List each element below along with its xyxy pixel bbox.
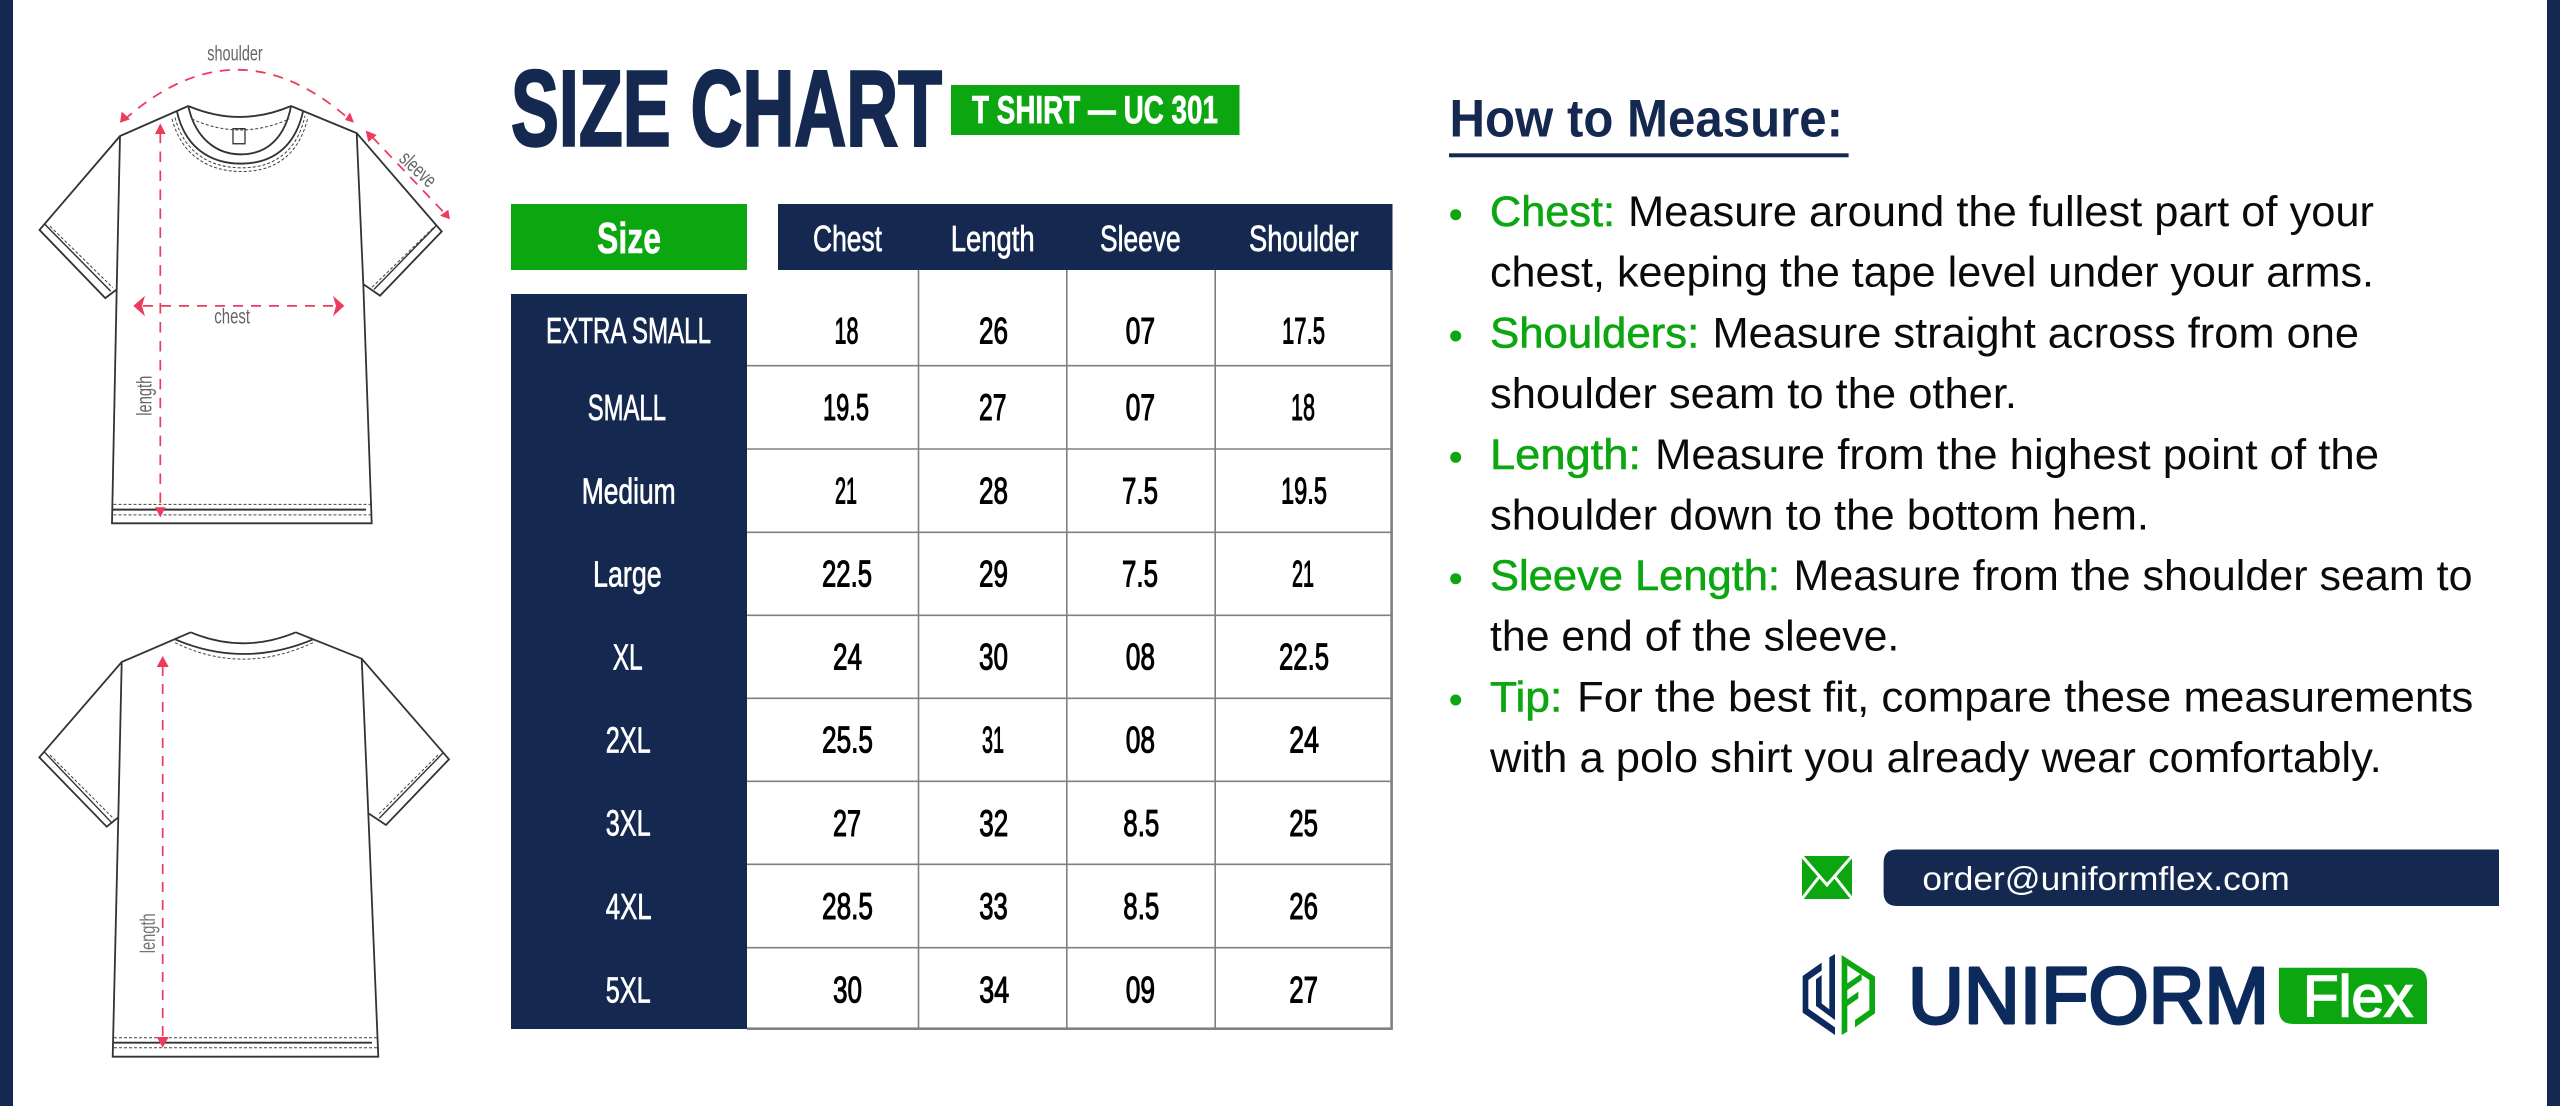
column values: shoulder: 18 [1291, 387, 1315, 428]
size labels column: 3XL [606, 803, 651, 844]
email pill [1884, 850, 2499, 906]
item: tip: For the best fit, compare these measurements [1577, 674, 2473, 722]
shirt front outline [40, 106, 442, 523]
column values: chest: 27 [833, 803, 861, 844]
size labels column [511, 294, 747, 1029]
badge: product code: T SHIRT — UC 301 [972, 89, 1218, 132]
logo badge: flex: Flex [2303, 965, 2413, 1030]
heading: how to measure: How to Measure: [1450, 90, 1843, 149]
column values: sleeve: 7.5 [1122, 470, 1158, 511]
header: size [511, 204, 747, 270]
header: measurement columns: Shoulder [1249, 218, 1359, 259]
column values: chest: 28.5 [822, 886, 873, 927]
item: sleeve length: Measure from the shoulder seam to [1794, 552, 2472, 600]
arrow: length [155, 123, 166, 517]
logo wordmark: UNIFORM [1908, 951, 2269, 1040]
item: length: Length: [1490, 431, 1641, 479]
item: shoulders: Shoulders: [1490, 310, 1699, 358]
column values: shoulder: 21 [1292, 554, 1314, 595]
column values: length: 33 [979, 886, 1008, 927]
arrow: sleeve [366, 130, 450, 219]
label: sleeve: sleeve [395, 147, 441, 192]
size labels column: 5XL [606, 969, 651, 1010]
logo: uniform flex [1803, 951, 2427, 1040]
size labels column: 2XL [606, 719, 651, 760]
column values: sleeve: 8.5 [1123, 803, 1159, 844]
column values: length: 28 [979, 470, 1008, 511]
right navy border [2547, 0, 2560, 1106]
column values: chest: 25.5 [822, 720, 873, 760]
item: length: shoulder down to the bottom hem. [1490, 491, 2149, 539]
item: sleeve length: Sleeve Length: [1490, 552, 1780, 600]
column values: length: 27 [979, 387, 1006, 428]
size labels column: EXTRA SMALL [546, 310, 711, 351]
arrow: shoulder [120, 70, 354, 123]
label: chest: chest [214, 306, 250, 328]
item: tip: Tip: [1490, 674, 1562, 722]
illustration: t-shirt back with measurements [39, 632, 449, 1057]
item: chest: chest, keeping the tape level under your arms. [1490, 249, 2374, 297]
column values: length: 34 [979, 969, 1009, 1010]
header: measurement columns [778, 204, 1392, 270]
header: measurement columns: Length [951, 218, 1035, 259]
grid lines [747, 270, 1393, 1029]
column values: length: 29 [979, 554, 1008, 595]
size labels column: Medium [582, 470, 676, 511]
column values: chest [822, 310, 873, 1010]
column values: chest: 19.5 [823, 387, 869, 428]
left navy border [0, 0, 13, 1106]
item: chest: Measure around the fullest part of your [1628, 188, 2374, 236]
item: length: Measure from the highest point of the [1655, 431, 2379, 479]
badge: product code [951, 85, 1240, 135]
column values: sleeve: 07 [1126, 310, 1155, 351]
item: tip [1450, 674, 2473, 782]
header: measurement columns: Sleeve [1100, 218, 1181, 259]
column values: shoulder: 26 [1289, 886, 1318, 927]
email pill: order@uniformflex.com [1922, 860, 2290, 897]
arrow: length back [157, 656, 169, 1048]
item: tip: with a polo shirt you already wear comfortably. [1489, 734, 2382, 782]
column values: chest: 22.5 [822, 554, 872, 595]
item: sleeve length: the end of the sleeve. [1490, 613, 1899, 661]
arrow: chest [133, 296, 344, 316]
size labels column: XL [613, 637, 643, 678]
size labels column: SMALL [588, 387, 666, 428]
column values: shoulder: 27 [1289, 969, 1318, 1010]
icon: envelope [1801, 855, 1853, 900]
size labels column: Large [593, 554, 662, 595]
column values: chest: 24 [833, 637, 862, 678]
header: measurement columns: Chest [813, 218, 882, 259]
list: measuring instructions [1450, 188, 2473, 782]
icon: logo hexagon [1803, 954, 1875, 1035]
shirt back outline [39, 632, 449, 1057]
header: size: Size [597, 214, 661, 263]
panel: size chart table [511, 204, 1393, 1029]
column values: sleeve: 07 [1126, 387, 1155, 428]
column values: shoulder [1279, 310, 1329, 1010]
column values: sleeve: 09 [1126, 969, 1155, 1010]
column values: length: 30 [979, 637, 1008, 678]
label: length back: length [137, 913, 160, 953]
item: chest [1450, 188, 2374, 297]
title: SIZE CHART [511, 48, 942, 168]
column values: chest: 30 [833, 969, 862, 1010]
column values: length: 32 [979, 803, 1008, 844]
size labels column: 4XL [606, 886, 652, 927]
column values: shoulder: 19.5 [1281, 470, 1327, 511]
item: shoulders: Measure straight across from one [1712, 310, 2359, 358]
column values: shoulder: 24 [1289, 720, 1319, 760]
column values: sleeve: 08 [1126, 720, 1155, 760]
column values: shoulder: 22.5 [1279, 637, 1329, 678]
column values: sleeve: 8.5 [1123, 886, 1159, 927]
column values: chest: 18 [834, 310, 858, 351]
item: shoulders [1450, 310, 2359, 418]
column values: sleeve: 08 [1126, 637, 1155, 678]
label: shoulder: shoulder [207, 42, 263, 66]
column values: chest: 21 [835, 470, 857, 511]
label: length: length [134, 376, 157, 416]
column values: length: 31 [982, 720, 1004, 760]
column values: shoulder: 25 [1289, 803, 1318, 844]
column values: shoulder: 17.5 [1282, 310, 1325, 351]
column values: length: 26 [979, 310, 1008, 351]
item: chest: Chest: [1490, 188, 1615, 236]
illustration: t-shirt front with measurements [40, 42, 450, 523]
column values: sleeve [1122, 310, 1159, 1010]
item: length [1450, 431, 2379, 539]
column values: length [979, 310, 1009, 1010]
item: sleeve length [1450, 552, 2472, 661]
item: shoulders: shoulder seam to the other. [1490, 370, 2017, 418]
column values: sleeve: 7.5 [1122, 554, 1158, 595]
